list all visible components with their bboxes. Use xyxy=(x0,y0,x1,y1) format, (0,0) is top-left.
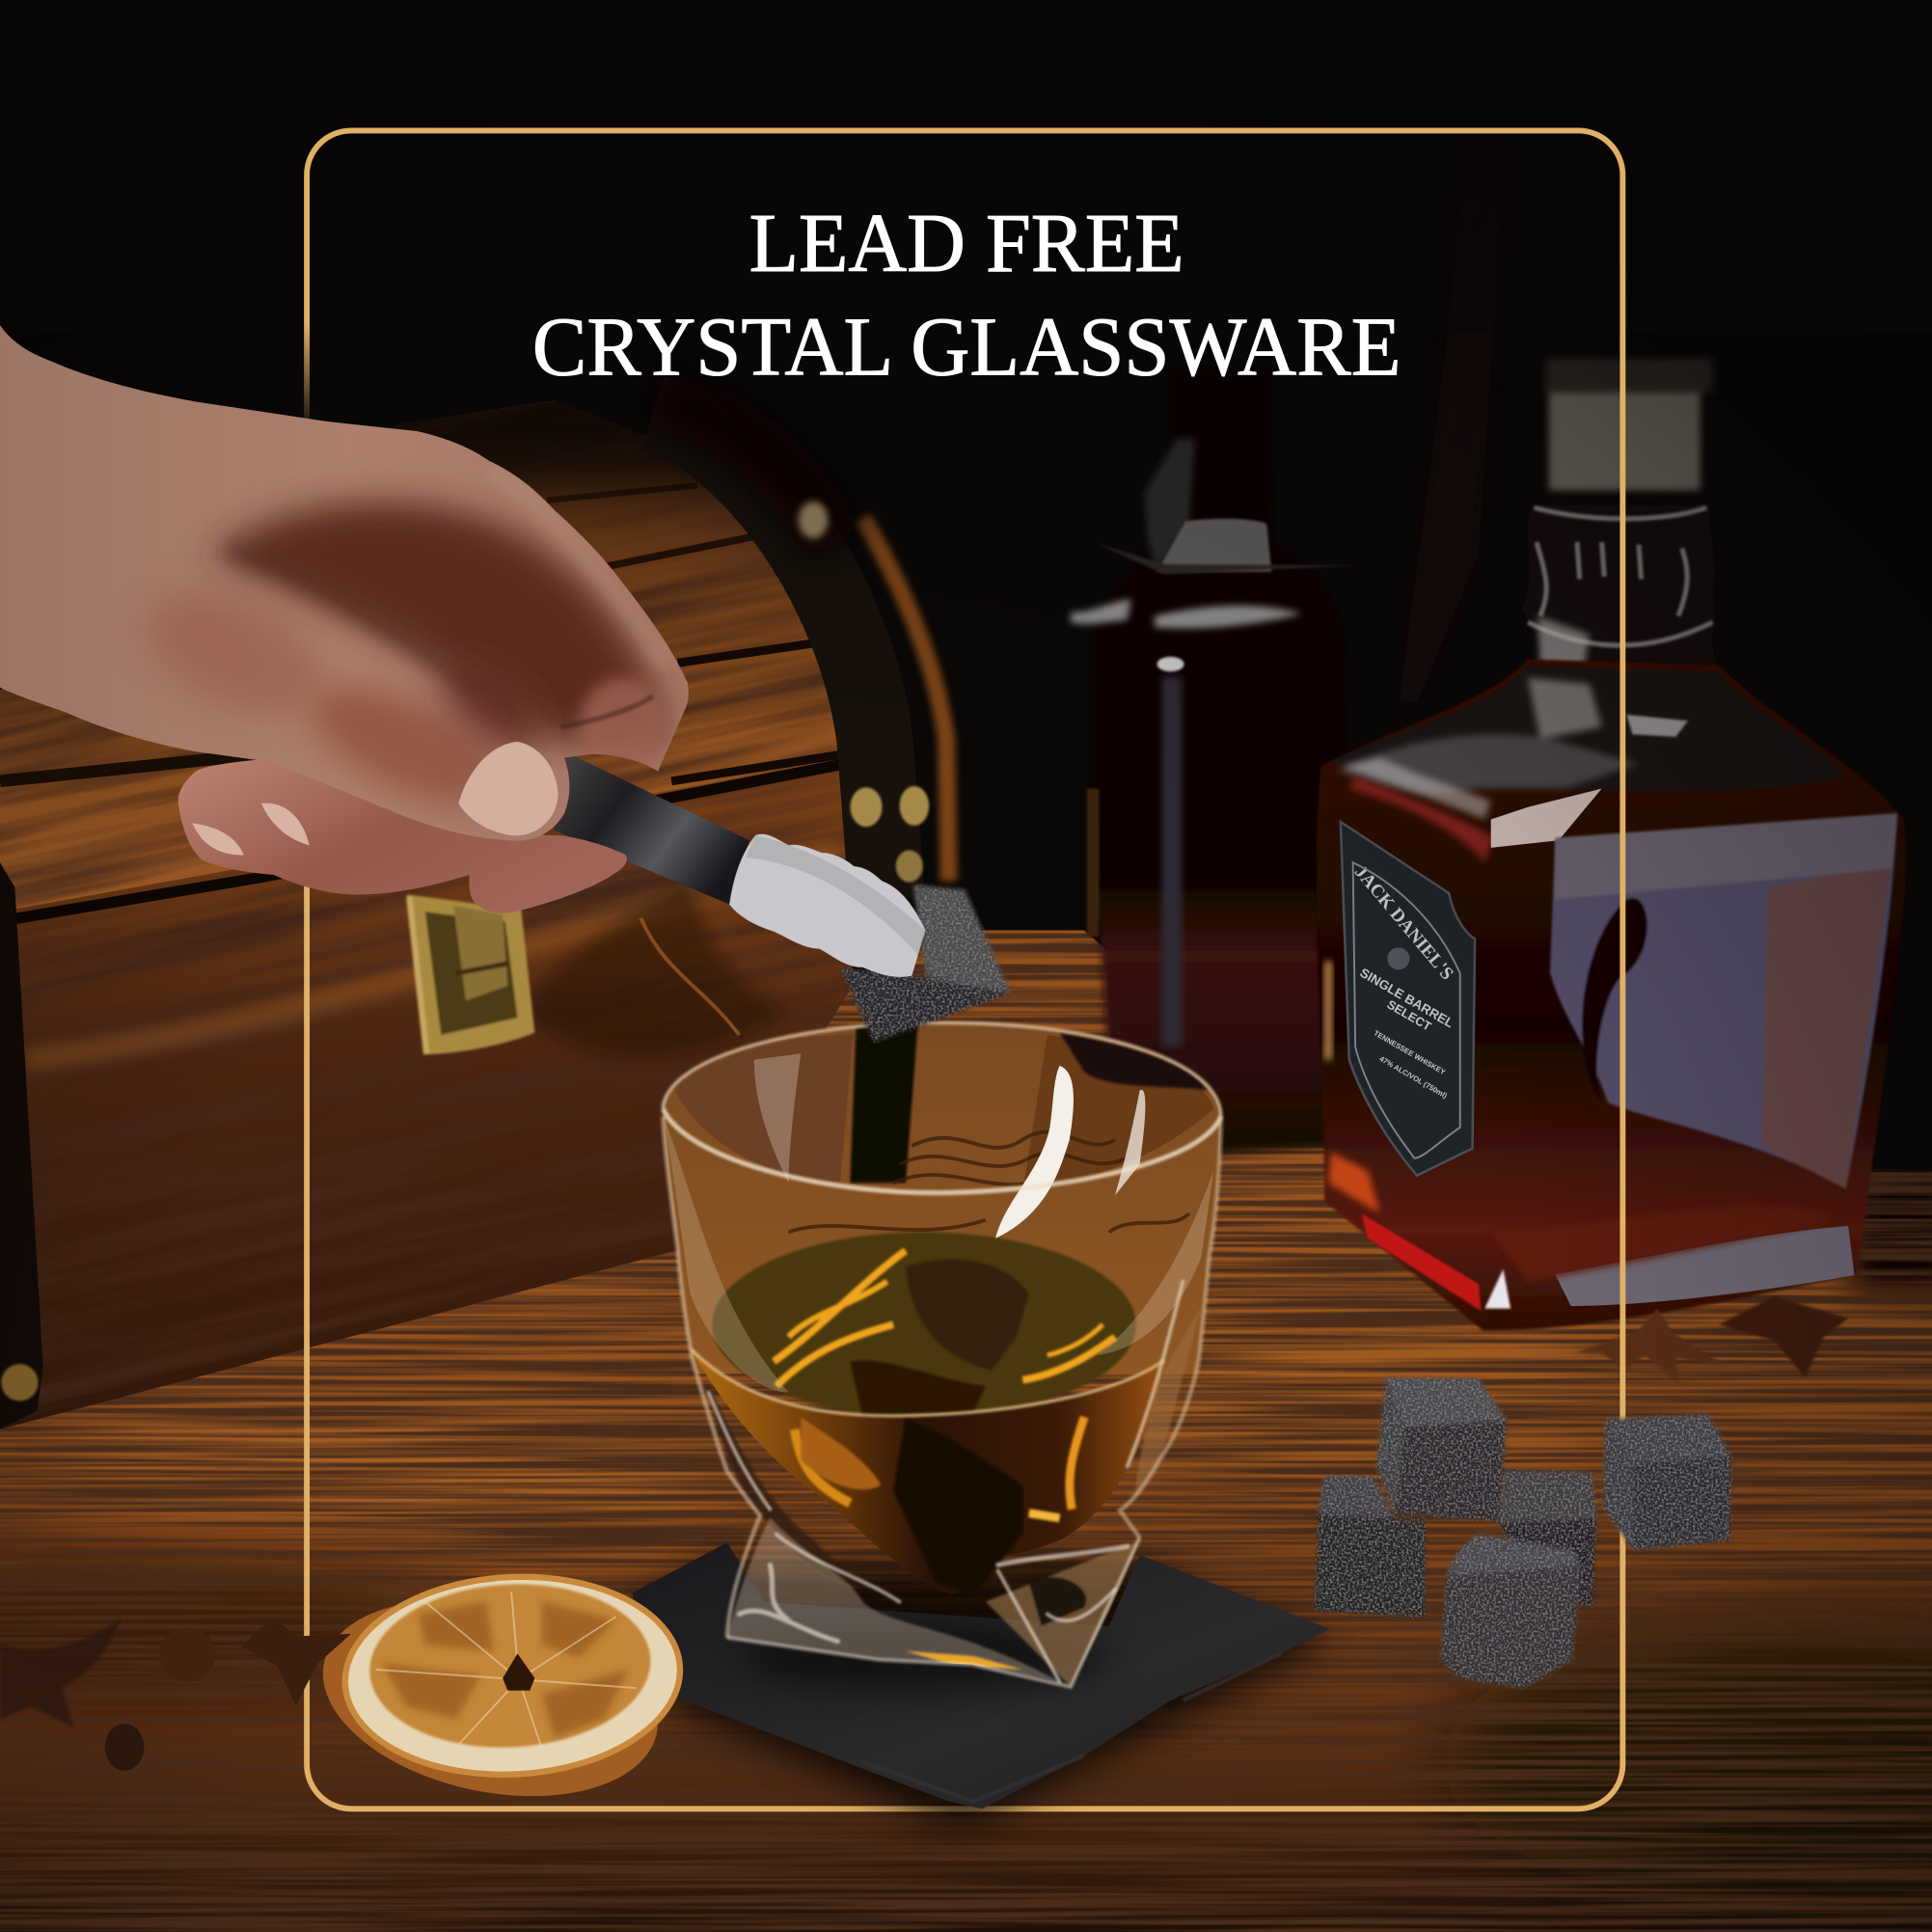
fingernail: ring finger xyxy=(261,803,310,845)
decanter neck xyxy=(1515,505,1731,684)
gold frame xyxy=(307,130,1622,1809)
dark whisky bottle xyxy=(1071,369,1356,1158)
decanter liquor glow xyxy=(1491,1206,1836,1282)
orange rind and pith xyxy=(340,1568,685,1782)
wooden chest xyxy=(0,376,963,1429)
thumbnail xyxy=(458,742,558,835)
table: wooden surface xyxy=(0,912,1932,1932)
stone cubes group xyxy=(1315,1377,1731,1688)
decanter shoulder glass xyxy=(1331,666,1848,862)
Jack Daniel's label: SELECT xyxy=(1385,996,1434,1034)
spices: table left xyxy=(0,1617,351,1771)
Jack Daniel's label: 47% ALC/VOL (750ml) xyxy=(1377,1054,1449,1101)
stone cube: right xyxy=(1603,1414,1731,1550)
brass clasp xyxy=(407,894,534,1054)
decanter body xyxy=(1317,659,1906,1331)
hand shading xyxy=(128,468,666,829)
decanter cork xyxy=(1545,359,1713,490)
tongs metal arm xyxy=(555,747,749,905)
Jack Daniel's label: TENNESSEE WHISKEY xyxy=(1373,1028,1447,1076)
Jack Daniel's label xyxy=(1341,822,1475,1176)
stone cube: top xyxy=(1376,1377,1507,1520)
chest side edge xyxy=(0,862,43,1429)
stone cube: left xyxy=(1315,1476,1426,1618)
fingernail: little finger xyxy=(192,823,244,856)
glass white reflections xyxy=(754,1053,1145,1238)
lower fingers xyxy=(178,759,627,913)
hand and tongs xyxy=(0,325,1010,1043)
lower glass twist xyxy=(705,1306,1201,1687)
whisky glass xyxy=(653,1017,1232,1692)
stones in liquid xyxy=(906,1260,1029,1370)
title: LEAD FREE xyxy=(749,197,1184,289)
stone cube: back right xyxy=(1498,1470,1597,1608)
chest rivet xyxy=(1,1364,39,1401)
decanter grey window xyxy=(1550,813,1897,1189)
decanter bright reflection xyxy=(1491,789,1602,848)
tongs silicone tip xyxy=(729,834,925,977)
hand back and thumb xyxy=(0,325,689,841)
Jack Daniel's label: JACK DANIEL'S xyxy=(1350,862,1457,984)
orange back slice xyxy=(305,1571,676,1825)
glass shadow xyxy=(739,1622,1109,1692)
star anise: table right xyxy=(1575,1296,1848,1382)
stone held by tongs xyxy=(840,884,1010,1043)
Jack Daniel's label: SINGLE BARREL xyxy=(1357,966,1456,1031)
glass rim xyxy=(663,1022,1221,1687)
dried orange slice xyxy=(305,1568,685,1825)
orange flesh xyxy=(366,1577,655,1755)
crystal glints xyxy=(709,1282,1183,1682)
whisky decanter xyxy=(1317,359,1906,1331)
title xyxy=(532,197,1401,393)
stone cube: front xyxy=(1440,1534,1581,1688)
glass upper view xyxy=(653,1017,1232,1374)
orange slice in liquid xyxy=(801,1417,881,1489)
chest iron band xyxy=(653,396,949,900)
liquid highlight xyxy=(774,1251,1115,1518)
decanter red edge xyxy=(1362,1213,1481,1311)
decanter base strip xyxy=(1555,1226,1855,1306)
liquid bowl xyxy=(692,1349,1164,1593)
glass side swirl xyxy=(666,1121,789,1392)
title: CRYSTAL GLASSWARE xyxy=(532,300,1401,393)
slate coaster xyxy=(632,1542,1329,1824)
liquid back surface xyxy=(712,1232,1136,1417)
background object: dim vertical bottle edge xyxy=(1400,142,1506,702)
